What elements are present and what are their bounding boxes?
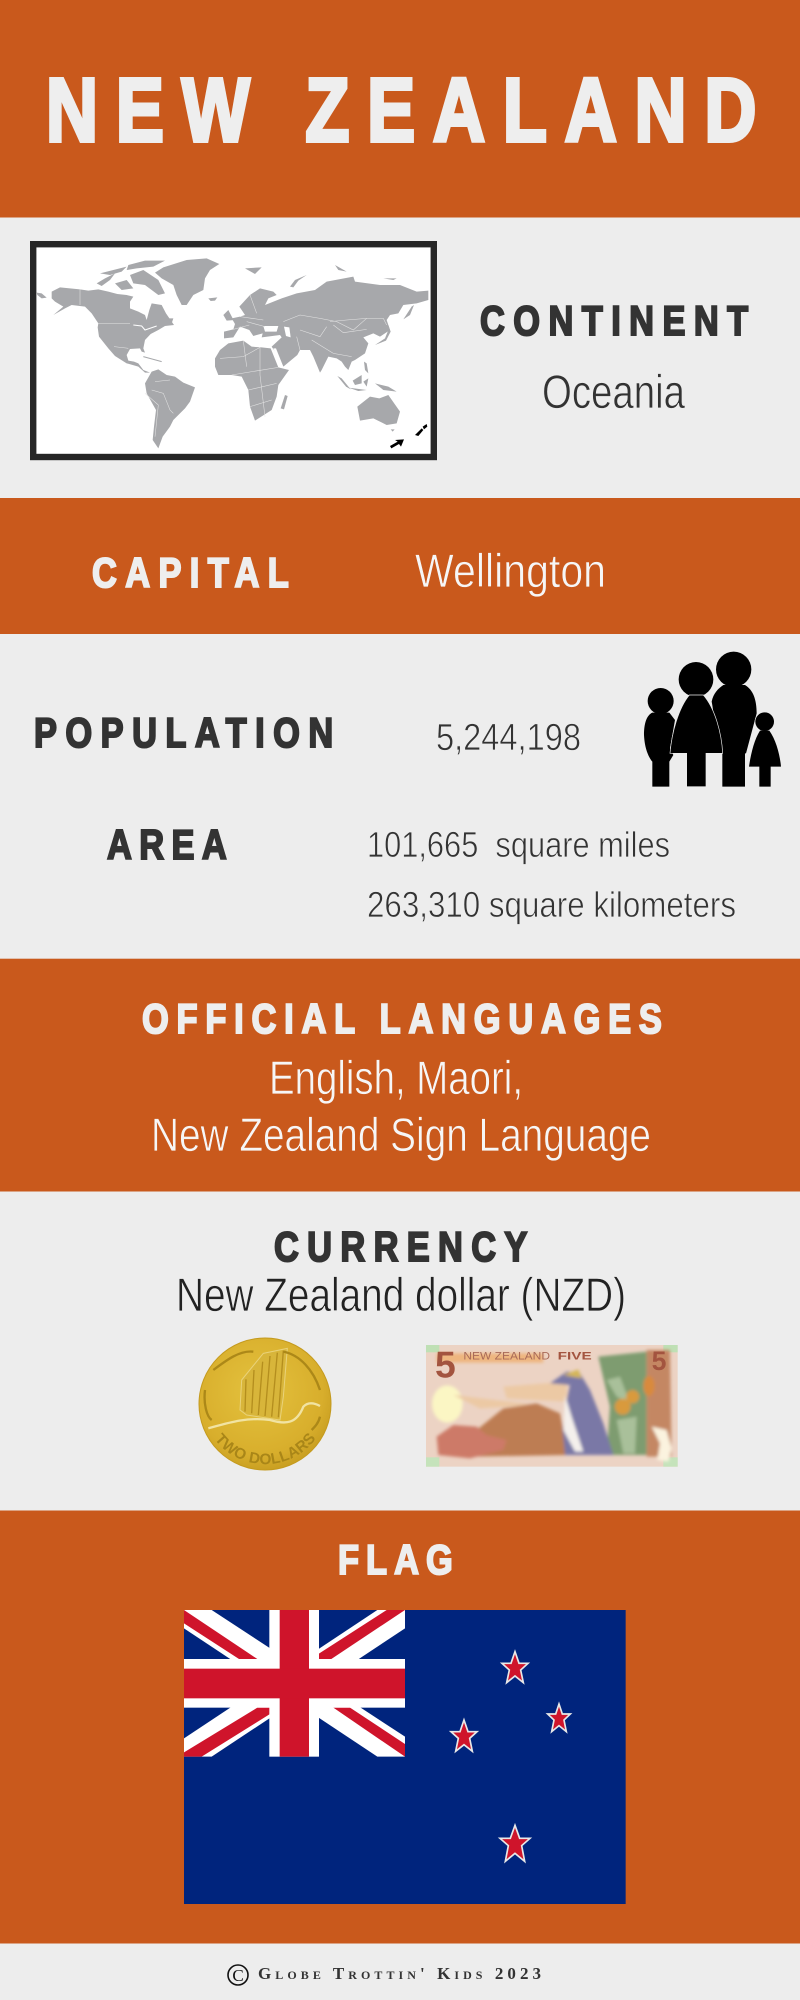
canton: Union Jack xyxy=(184,1610,405,1757)
title: NEW ZEALAND xyxy=(46,60,756,161)
panel: continent xyxy=(0,218,800,498)
text: population value: 5,244,198 xyxy=(436,717,581,759)
panel: flag xyxy=(0,1510,800,1944)
heading: currency: CURRENCY xyxy=(274,1224,527,1271)
panel: footer xyxy=(0,1944,800,2000)
panel: official languages xyxy=(0,959,800,1192)
text: Oceania: Oceania xyxy=(542,365,686,418)
panel: currency xyxy=(176,1224,678,1470)
icon: copyright symbol xyxy=(228,1965,248,1985)
image: five dollar banknote: 5 xyxy=(435,1343,456,1385)
image: five dollar banknote: FIVE xyxy=(558,1350,592,1362)
text: New Zealand dollar: New Zealand dollar (NZD) xyxy=(176,1268,626,1321)
text: Wellington: Wellington xyxy=(415,544,606,597)
icon: family silhouette xyxy=(644,652,781,787)
heading: flag: FLAG xyxy=(338,1537,453,1584)
heading: capital: CAPITAL xyxy=(92,550,289,597)
icon: two dollar coin: TWO DOLLARS xyxy=(216,1432,314,1464)
text: footer credit: Globe Trottin' Kids 2023 xyxy=(258,1964,541,1983)
heading: continent: CONTINENT xyxy=(480,298,749,345)
icon: copyright symbol: C xyxy=(232,1966,244,1985)
panel: title banner xyxy=(0,0,800,218)
heading: population: POPULATION xyxy=(34,710,333,757)
text: area in square miles: 101,665 square miles xyxy=(367,824,670,865)
heading: official languages: OFFICIAL LANGUAGES xyxy=(142,996,662,1043)
image: five dollar banknote: NEW ZEALAND xyxy=(463,1350,550,1362)
image: five dollar banknote xyxy=(426,1343,678,1467)
text: English, Maori: English, Maori, xyxy=(269,1051,523,1104)
image: New Zealand flag xyxy=(184,1610,626,1904)
heading: area: AREA xyxy=(107,822,227,869)
panel: capital xyxy=(0,498,800,634)
stars: Southern Cross xyxy=(451,1652,570,1861)
text: New Zealand Sign Language: New Zealand Sign Language xyxy=(151,1108,651,1161)
world map with New Zealand arrow xyxy=(33,244,434,457)
panel: population and area xyxy=(0,634,800,959)
image: five dollar banknote: 5 xyxy=(652,1346,667,1376)
text: area in square kilometers: 263,310 square kilometers xyxy=(367,884,736,925)
icon: two dollar coin xyxy=(198,1338,332,1470)
